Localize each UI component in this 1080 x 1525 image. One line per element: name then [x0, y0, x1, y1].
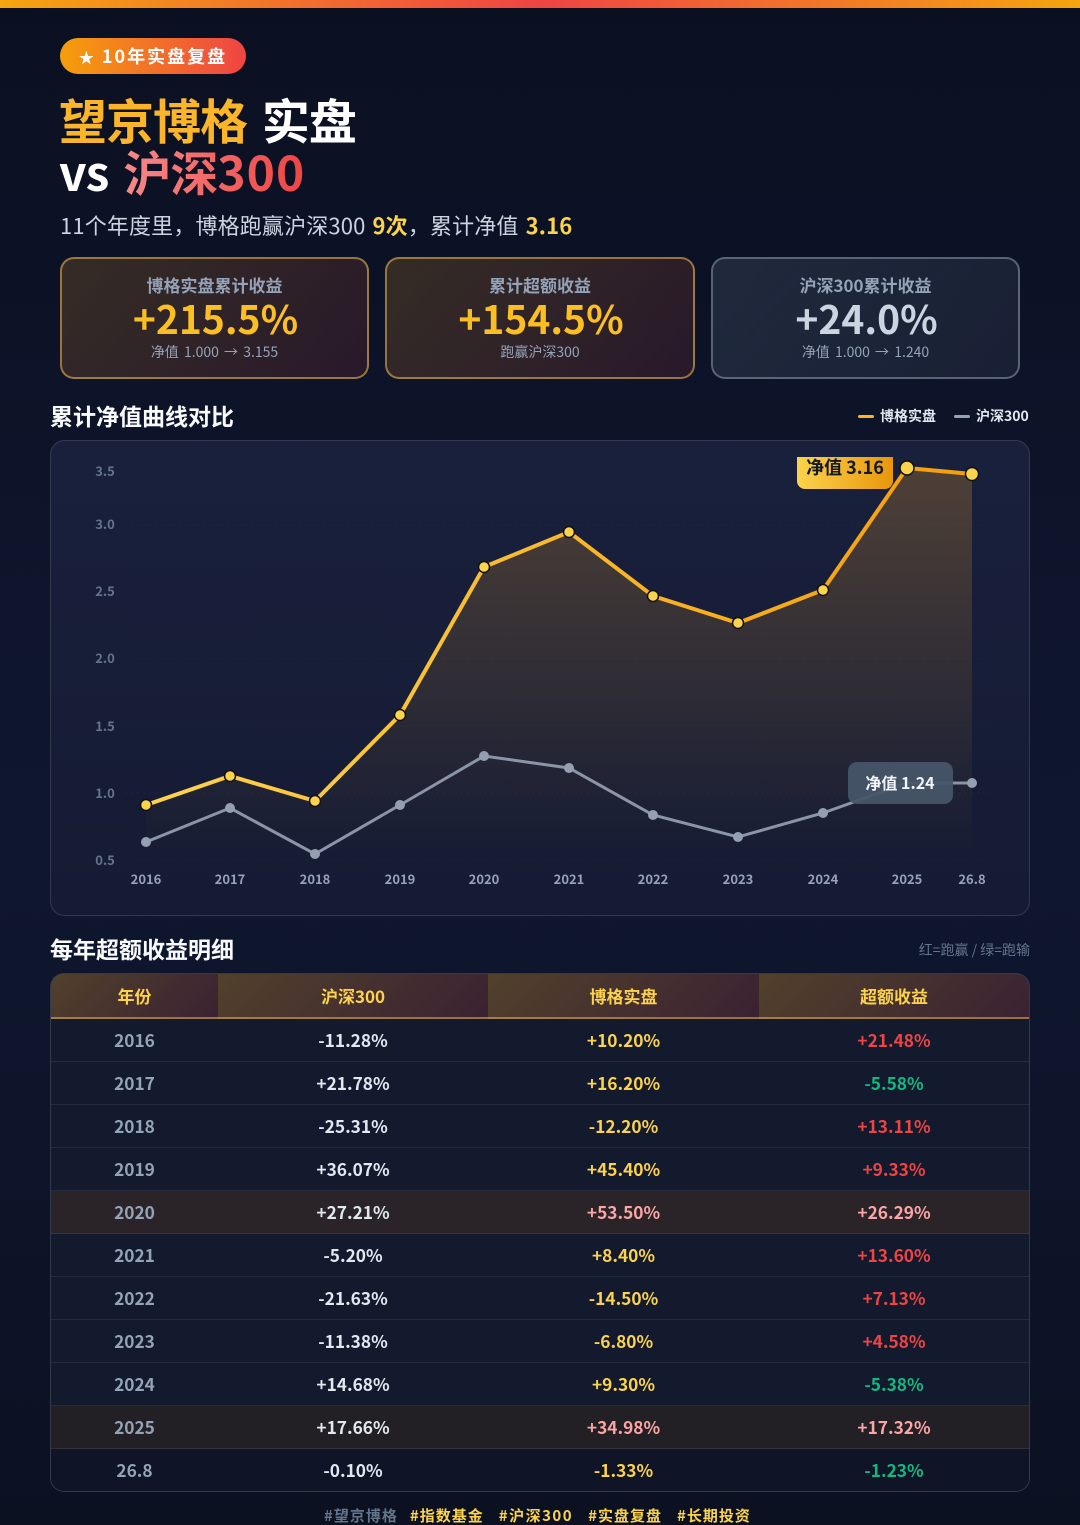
row 2016: +21.48%	[857, 1027, 931, 1052]
panel: line chart	[50, 440, 1030, 916]
chart legend	[858, 406, 1029, 426]
x axis labels: 2022	[638, 869, 668, 888]
line: 博格实盘	[140, 461, 978, 810]
row 2018: 2018	[114, 1113, 155, 1138]
x axis labels: 2017	[215, 869, 246, 888]
row 2023: 2023	[114, 1328, 155, 1353]
row 2023: -11.38%	[318, 1328, 388, 1353]
row 2025: +17.66%	[316, 1414, 390, 1439]
stat card: 沪深300累计收益: +24.0%	[795, 290, 938, 346]
x axis labels: 2018	[300, 869, 331, 888]
row 2020: 2020	[114, 1199, 155, 1224]
row 2019: +9.33%	[862, 1156, 926, 1181]
row 2019: 2019	[114, 1156, 155, 1181]
stat card: 累计超额收益: +154.5%	[458, 290, 624, 346]
row 2023	[51, 1320, 1029, 1363]
row 2022: 2022	[114, 1285, 155, 1310]
row 2017: 2017	[114, 1070, 155, 1095]
y axis labels: 1.5	[95, 716, 115, 735]
y axis labels: 0.5	[95, 850, 115, 869]
row 2020: +53.50%	[587, 1199, 660, 1224]
badge	[60, 38, 246, 74]
row 2020	[51, 1191, 1029, 1234]
row 2023: -6.80%	[594, 1328, 653, 1353]
row 2020: +26.29%	[857, 1199, 931, 1224]
row 26.8: 26.8	[116, 1457, 153, 1482]
row 26.8: -1.23%	[864, 1457, 924, 1482]
row 2021: -5.20%	[323, 1242, 383, 1267]
x axis labels: 26.8	[958, 869, 986, 888]
stat card: 沪深300累计收益	[711, 257, 1020, 379]
stat card: 博格实盘累计收益	[60, 257, 369, 379]
row 2021	[51, 1234, 1029, 1277]
row 26.8	[51, 1449, 1029, 1492]
x axis labels: 2021	[554, 869, 584, 888]
row 2024	[51, 1363, 1029, 1406]
x axis labels: 2020	[469, 869, 500, 888]
stat card: 累计超额收益: 累计超额收益	[489, 272, 591, 297]
row 2018	[51, 1105, 1029, 1148]
stat card: 博格实盘累计收益: 净值 1.000 → 3.155	[151, 342, 278, 362]
callout: 净值 3.16: 净值 3.16	[806, 454, 884, 480]
title: vs 沪深300	[59, 135, 305, 205]
row 2023: +4.58%	[862, 1328, 926, 1353]
row 2016: 2016	[114, 1027, 155, 1052]
heading: 累计净值曲线对比: 累计净值曲线对比	[50, 398, 234, 432]
title: 望京博格 实盘	[59, 83, 356, 153]
row 2025	[51, 1406, 1029, 1449]
row 2017: +16.20%	[587, 1070, 660, 1095]
y axis labels: 2.0	[95, 648, 115, 667]
x axis labels	[131, 869, 986, 888]
x axis labels: 2019	[385, 869, 415, 888]
stat card: 博格实盘累计收益: 博格实盘累计收益	[146, 272, 282, 297]
callout: 净值 1.24: 净值 1.24	[865, 770, 935, 794]
x axis labels: 2025	[892, 869, 922, 888]
row 2022: -21.63%	[318, 1285, 388, 1310]
y axis labels: 3.0	[95, 514, 115, 533]
table header: 沪深300	[321, 983, 385, 1008]
y axis labels: 1.0	[95, 783, 115, 802]
row 2021: +8.40%	[592, 1242, 655, 1267]
stat card: 累计超额收益	[385, 257, 695, 379]
callout: 净值 1.24	[848, 762, 953, 804]
row 2016: +10.20%	[587, 1027, 660, 1052]
row 2025: +17.32%	[857, 1414, 931, 1439]
chart legend: 博格实盘	[880, 406, 936, 426]
y axis labels: 2.5	[95, 581, 115, 600]
heading: 每年超额收益明细: 每年超额收益明细	[50, 931, 234, 965]
callout: 净值 3.16	[797, 454, 893, 489]
row 2024: 2024	[114, 1371, 155, 1396]
chart legend: 沪深300	[976, 406, 1029, 426]
row 2021: +13.60%	[857, 1242, 931, 1267]
line: 沪深300	[141, 751, 977, 859]
x axis labels: 2023	[723, 869, 753, 888]
row 2022: -14.50%	[589, 1285, 658, 1310]
row 2019: +36.07%	[316, 1156, 390, 1181]
row 2024: +9.30%	[592, 1371, 655, 1396]
row 26.8: -0.10%	[323, 1457, 383, 1482]
table header: 博格实盘	[590, 983, 658, 1008]
row 2025: +34.98%	[587, 1414, 660, 1439]
badge: ★ 10年实盘复盘	[79, 43, 227, 69]
table legend note: 红=跑赢 / 绿=跑输	[919, 940, 1030, 960]
y axis labels: 3.5	[95, 461, 115, 480]
table: yearly excess return	[50, 973, 1030, 1492]
x axis labels: 2024	[808, 869, 839, 888]
stat card: 沪深300累计收益: 沪深300累计收益	[799, 272, 932, 297]
row 2024: -5.38%	[864, 1371, 924, 1396]
row 2016: -11.28%	[318, 1027, 388, 1052]
row 2022	[51, 1277, 1029, 1320]
row 2025: 2025	[114, 1414, 155, 1439]
title	[59, 83, 356, 205]
row 2017: +21.78%	[316, 1070, 390, 1095]
top gradient bar	[0, 0, 1080, 8]
row 2017: -5.58%	[864, 1070, 924, 1095]
table header: 年份	[118, 983, 152, 1008]
row 2020: +27.21%	[316, 1199, 390, 1224]
row 2019	[51, 1148, 1029, 1191]
stat card: 博格实盘累计收益: +215.5%	[133, 290, 298, 346]
row 2019: +45.40%	[587, 1156, 660, 1181]
row 2018: -25.31%	[318, 1113, 388, 1138]
table header	[51, 974, 1029, 1019]
row 2018: +13.11%	[857, 1113, 931, 1138]
stat card: 累计超额收益: 跑赢沪深300	[500, 342, 580, 362]
row 2024: +14.68%	[316, 1371, 390, 1396]
table header: 超额收益	[860, 983, 928, 1008]
row 2018: -12.20%	[589, 1113, 658, 1138]
area under 博格实盘 line	[146, 468, 972, 860]
stat card: 沪深300累计收益: 净值 1.000 → 1.240	[802, 342, 929, 362]
y axis labels	[95, 461, 115, 869]
subtitle: 11个年度里，博格跑赢沪深300 9次，累计净值 3.16	[60, 209, 572, 241]
row 2017	[51, 1062, 1029, 1105]
x axis labels: 2016	[131, 869, 162, 888]
row 26.8: -1.33%	[594, 1457, 653, 1482]
row 2022: +7.13%	[862, 1285, 926, 1310]
row 2021: 2021	[114, 1242, 155, 1267]
row 2016	[51, 1019, 1029, 1062]
